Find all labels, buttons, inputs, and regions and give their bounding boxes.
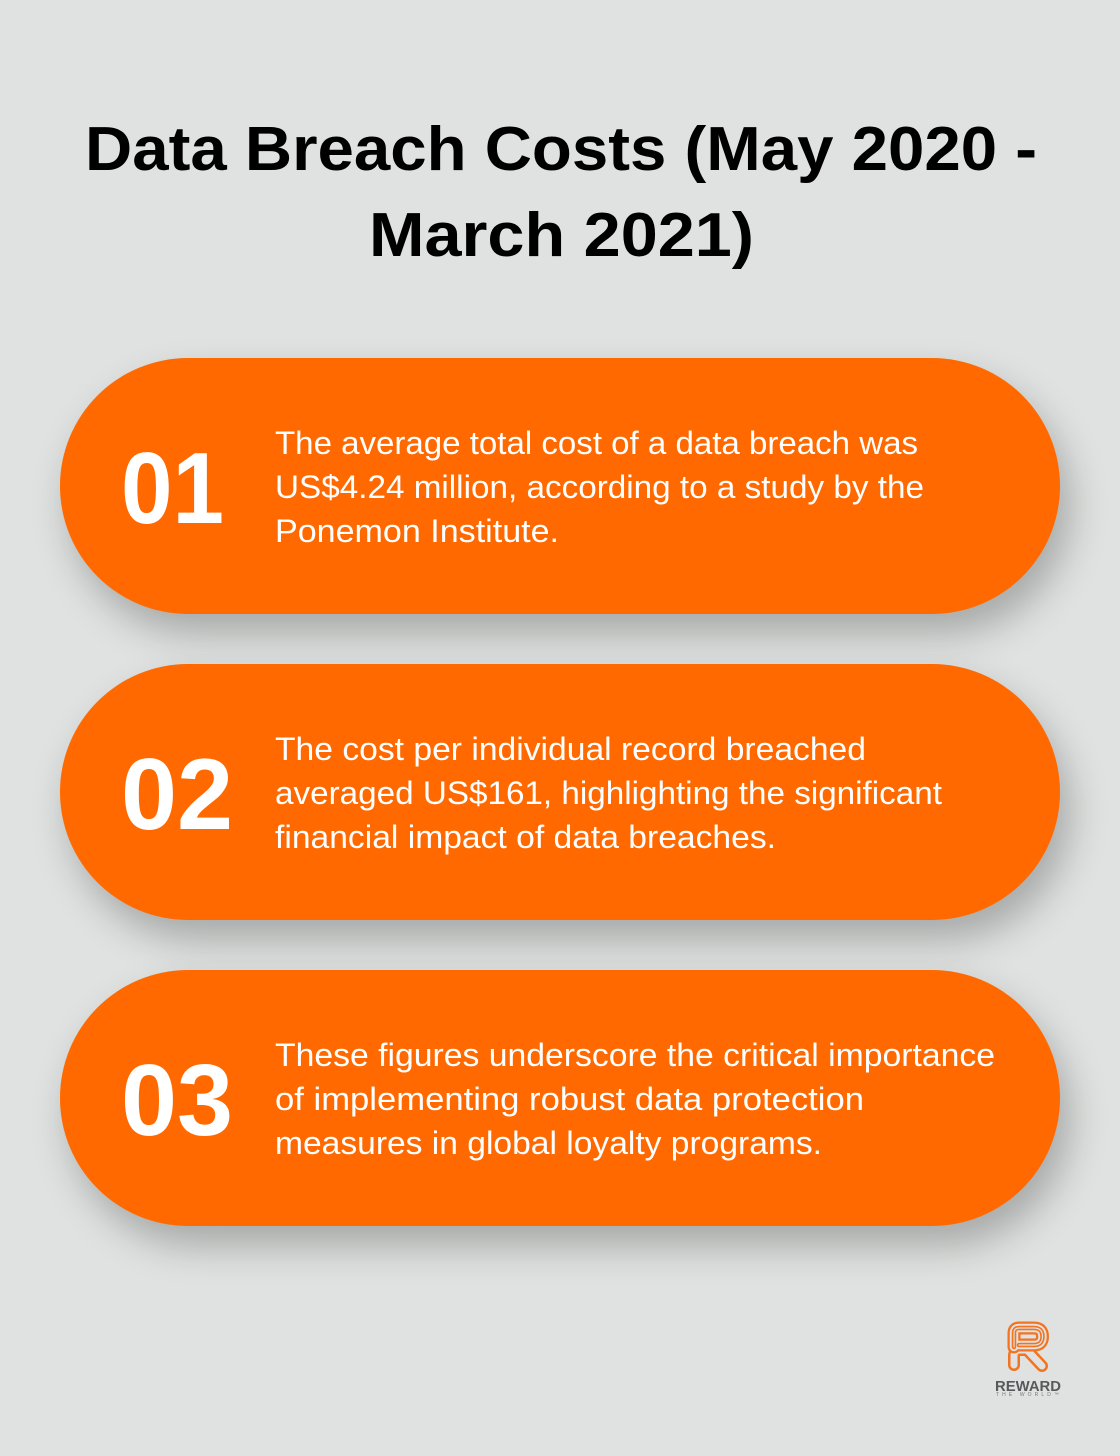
number 02: 02 [121,739,233,851]
title: March 2021) [369,200,754,270]
card background 3 [60,970,1060,1226]
icon: R mark [1014,1328,1042,1366]
text block 03: of implementing robust data protection [275,1081,864,1117]
panel: item 03 text [121,1037,995,1161]
text block 02: financial impact of data breaches. [275,819,776,855]
logo tagline: THE WORLD™ [996,1392,1059,1398]
text block 01 [275,425,924,549]
title [85,114,1037,270]
text block 02: averaged US$161, highlighting the significant [275,775,942,811]
panel: item 02 text [121,731,942,855]
text block 03: These figures underscore the critical importance [275,1037,995,1073]
text block 02 [275,731,942,855]
text block 01: Ponemon Institute. [275,513,559,549]
logo: Reward the World [995,1328,1061,1398]
text block 01: US$4.24 million, according to a study by the [275,469,924,505]
text block 03: measures in global loyalty programs. [275,1125,822,1161]
text block 02: The cost per individual record breached [275,731,866,767]
number 03: 03 [121,1045,233,1157]
number 01: 01 [121,433,224,545]
text block 01: The average total cost of a data breach was [275,425,918,461]
text block 03 [275,1037,995,1161]
card background 1 [60,358,1060,614]
panel: item 01 text [121,425,924,549]
card background 2 [60,664,1060,920]
title: Data Breach Costs (May 2020 - [85,114,1037,184]
logo wordmark: REWARD [995,1379,1061,1395]
